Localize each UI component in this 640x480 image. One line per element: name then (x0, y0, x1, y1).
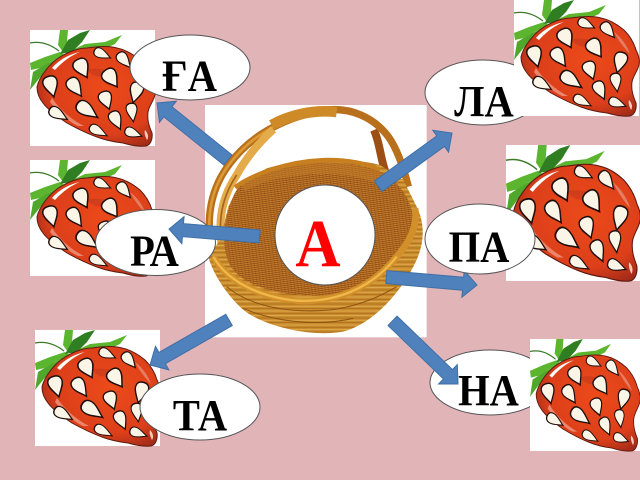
arrow to НА (383, 311, 467, 394)
syllable bubble: ҒА (130, 35, 250, 101)
label: ЛА: ЛА (454, 77, 514, 126)
strawberry: bottom left (35, 330, 160, 446)
strawberry: top left (30, 30, 155, 146)
syllable bubble: ҒА: ҒА (162, 52, 217, 101)
syllable bubble: ТА (140, 374, 260, 440)
arrow to ҒА (149, 92, 236, 171)
strawberry: bottom right (530, 339, 640, 451)
basket (205, 105, 427, 337)
syllable bubble: РА (96, 210, 216, 276)
syllable bubble: ПА (425, 204, 535, 274)
arrow to ТА (143, 308, 236, 377)
strawberry: middle left (30, 160, 155, 276)
syllable bubble: ПА: ПА (449, 223, 510, 272)
arrow to ПА (385, 264, 478, 298)
syllable bubble: ТА: ТА (173, 391, 228, 440)
center circle with letter А: А (295, 207, 341, 282)
arrow to ЛА (370, 122, 460, 197)
strawberry: top right (514, 0, 639, 116)
strawberry: middle right (506, 145, 640, 281)
ellipse: ЛА (425, 60, 541, 125)
label: НА: НА (458, 366, 519, 415)
arrow to РА (168, 216, 261, 250)
syllable bubble: РА: РА (130, 227, 179, 276)
ellipse: НА (430, 350, 550, 415)
center circle with letter А (275, 185, 375, 285)
